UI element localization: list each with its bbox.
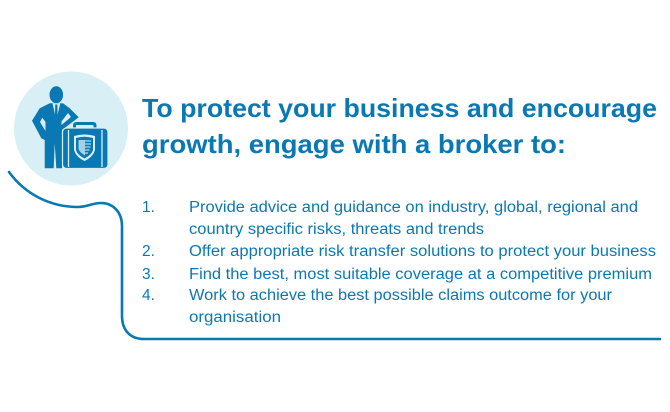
item 4: Work to achieve the best possible claims outcome for your [189,287,612,304]
connector line [9,172,660,339]
item 1 [142,199,638,238]
item 1: Provide advice and guidance on industry, global, regional and [189,199,638,216]
icon: businessman [32,86,79,168]
item 4 [142,287,612,326]
item 1: country specific risks, threats and trends [189,221,484,238]
item 4: organisation [189,309,281,326]
item 2: Offer appropriate risk transfer solutions to protect your business [189,243,656,260]
item 2: 2. [142,243,155,260]
numbered list [142,199,656,326]
item 1: 1. [142,199,155,216]
icon: suitcase [62,124,108,168]
item 3: 3. [142,266,155,283]
heading: growth, engage with a broker to: [142,129,566,159]
icon: businessman with suitcase in circle [14,72,128,186]
heading: To protect your business and encourage [142,93,657,123]
item 4: 4. [142,287,155,304]
heading [142,93,657,159]
item 3: Find the best, most suitable coverage at a competitive premium [189,266,652,283]
